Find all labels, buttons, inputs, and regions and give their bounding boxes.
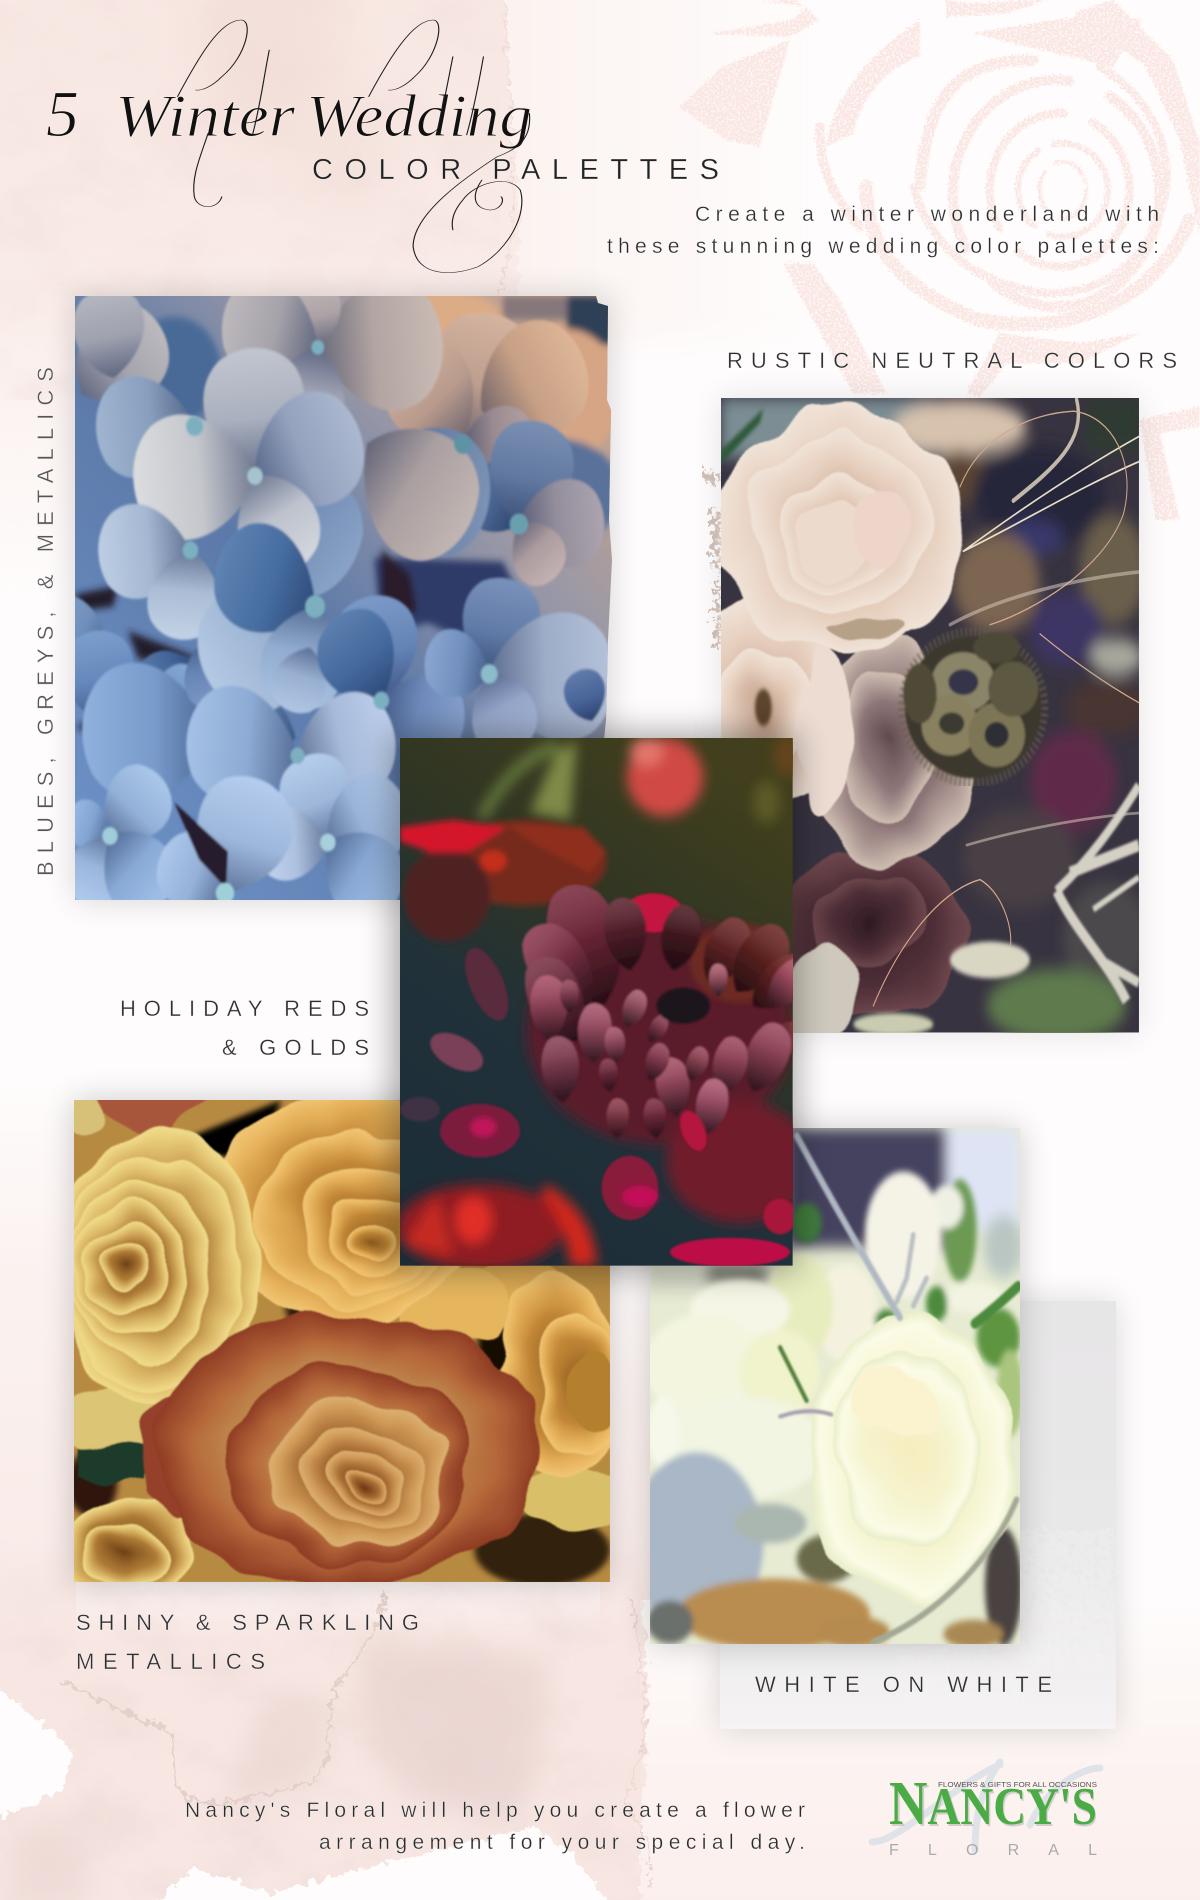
card texture	[900, 1530, 1116, 1710]
pale antlers	[1057, 785, 1139, 1001]
title script words: Winter	[115, 83, 296, 149]
panel: white on white backing card	[720, 1301, 1116, 1729]
closing text	[185, 1799, 805, 1854]
logo floral line: FLORAL	[889, 1842, 1097, 1859]
label: shiny and sparkling metallics: METALLICS	[76, 1649, 265, 1674]
decorative rose stamp	[680, 0, 1200, 520]
logo backing flourish	[872, 1762, 1100, 1850]
logo wordmark shadow: NANCY'S	[891, 1772, 1098, 1840]
label: holiday reds and golds: & GOLDS	[222, 1035, 369, 1060]
torn edge specks	[703, 470, 721, 650]
title script flourishes	[177, 20, 530, 273]
photo: rustic neutral roses	[690, 398, 1150, 1047]
title	[46, 20, 719, 273]
label: blues, greys and metallics: BLUES, GREYS, & METALLICS	[33, 367, 58, 876]
title script words	[46, 78, 532, 151]
photo: gold and copper roses	[58, 1087, 624, 1597]
logo: Nancy's Floral	[872, 1762, 1100, 1859]
closing text: Nancy's Floral will help you create a flower	[185, 1799, 805, 1822]
photo: deep red dahlia	[392, 732, 820, 1272]
intro text: Create a winter wonderland with	[695, 203, 1159, 226]
title script words: 5	[46, 78, 79, 151]
scabiosa seed pod	[903, 632, 1042, 779]
logo wordmark: NANCY'S	[889, 1770, 1097, 1838]
intro text: these stunning wedding color palettes:	[607, 235, 1159, 258]
title script words: Wedding	[306, 83, 532, 149]
label: holiday reds and golds	[120, 996, 369, 1060]
label: white on white: WHITE ON WHITE	[755, 1672, 1052, 1697]
title subtitle: COLOR PALETTES	[312, 154, 719, 186]
intro text	[607, 203, 1159, 258]
closing text: arrangement for your special day.	[319, 1831, 805, 1854]
label: shiny and sparkling metallics	[76, 1610, 419, 1674]
photo: blue hydrangea	[15, 264, 621, 938]
logo tagline: FLOWERS & GIFTS FOR ALL OCCASIONS	[938, 1782, 1097, 1789]
label: shiny and sparkling metallics: SHINY & SPARKLING	[76, 1610, 419, 1635]
photo: white roses and tulips	[630, 1128, 1023, 1650]
label: holiday reds and golds: HOLIDAY REDS	[120, 996, 369, 1021]
label: rustic neutral colors: RUSTIC NEUTRAL COLORS	[727, 348, 1177, 373]
